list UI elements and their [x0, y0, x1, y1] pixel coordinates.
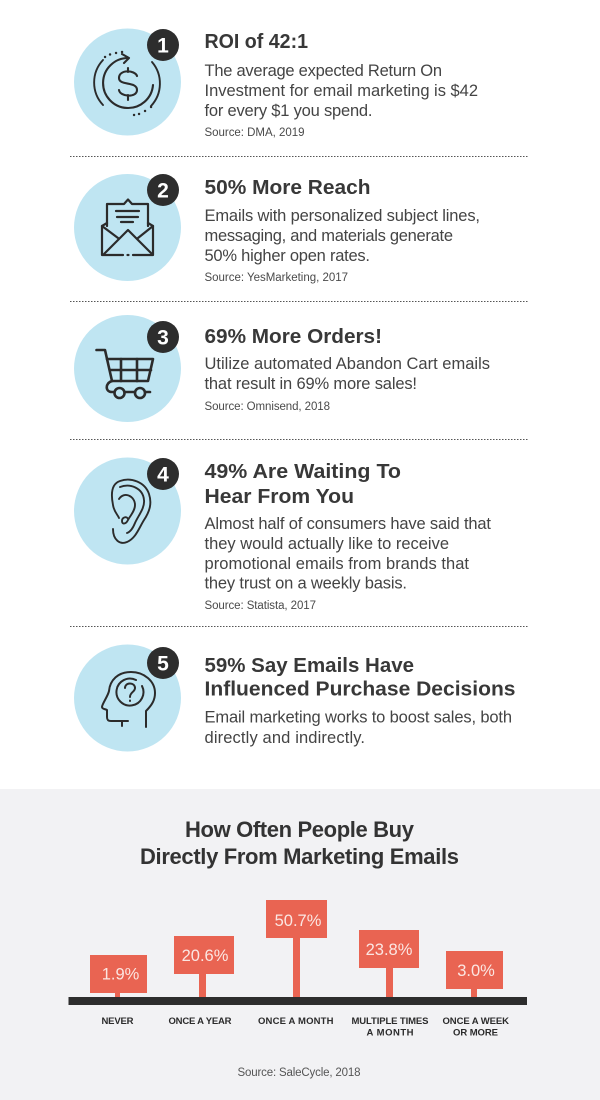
- axis labels: A MONTH: [366, 1028, 414, 1038]
- axis labels: ONCE A YEAR: [168, 1016, 232, 1027]
- body text 4: they would actually like to receive: [204, 535, 449, 553]
- badge 3: 3: [157, 326, 169, 350]
- panel: item 1 ROI: [74, 28, 478, 139]
- heading 4: Hear From You: [204, 486, 354, 508]
- badge 1: 1: [157, 34, 169, 58]
- heading 4: 49% Are Waiting To: [204, 461, 401, 483]
- badge 3: [147, 321, 179, 353]
- icon: ear: [112, 480, 150, 543]
- bar: once a week or more 3.0%: [446, 951, 503, 998]
- icon circle 3: [74, 315, 181, 422]
- source 2: Source: YesMarketing, 2017: [204, 272, 348, 284]
- icon: dollar cycle: [94, 52, 160, 115]
- heading 1: ROI of 42:1: [204, 31, 308, 53]
- body text 3: that result in 69% more sales!: [204, 375, 417, 393]
- body text 3: Utilize automated Abandon Cart emails: [204, 355, 490, 373]
- icon: shopping cart: [96, 350, 153, 398]
- panel background: [0, 789, 600, 1100]
- badge 2: 2: [157, 180, 169, 202]
- body text 4: [204, 515, 491, 592]
- panel: item 5 influence: [74, 644, 516, 752]
- icon circle 5: [74, 644, 181, 752]
- axis labels: [102, 1016, 509, 1038]
- body text 1: Investment for email marketing is $42: [204, 82, 478, 100]
- chart title: Directly From Marketing Emails: [140, 844, 459, 869]
- source 4: Source: Statista, 2017: [204, 600, 316, 612]
- heading 2: 50% More Reach: [204, 177, 370, 199]
- heading 5: 59% Say Emails Have: [204, 655, 414, 677]
- heading 5: Influenced Purchase Decisions: [204, 678, 516, 700]
- chart baseline: [68, 997, 527, 1005]
- body text 2: messaging, and materials generate: [204, 227, 453, 245]
- badge 2: [147, 174, 179, 206]
- bar: once a month 50.7%: 50.7%: [275, 912, 322, 930]
- body text 5: Email marketing works to boost sales, both: [204, 708, 512, 726]
- heading 5: [204, 655, 516, 700]
- body text 1: [204, 62, 478, 120]
- heading 4: [204, 461, 401, 508]
- bar: multiple times a month 23.8%: [359, 930, 419, 998]
- bar: once a year 20.6%: [174, 936, 234, 998]
- source 1: Source: DMA, 2019: [204, 127, 304, 139]
- axis labels: ONCE A MONTH: [258, 1016, 334, 1027]
- body text 4: Almost half of consumers have said that: [204, 515, 491, 533]
- chart title: How Often People Buy: [185, 817, 415, 842]
- chart title: [140, 817, 459, 869]
- bar: once a week or more 3.0%: 3.0%: [457, 962, 495, 980]
- chart source: Source: SaleCycle, 2018: [238, 1067, 360, 1079]
- icon circle 1: [74, 28, 181, 136]
- heading 3: 69% More Orders!: [204, 326, 382, 348]
- icon circle 4: [74, 458, 181, 564]
- body text 2: [204, 207, 480, 265]
- bar: once a month 50.7%: [266, 900, 327, 998]
- bar: never 1.9%: 1.9%: [102, 966, 140, 984]
- bar: once a year 20.6%: 20.6%: [182, 947, 229, 965]
- icon: head with question mark: [102, 672, 155, 727]
- panel: item 4 waiting: [74, 458, 491, 612]
- bar: multiple times a month 23.8%: 23.8%: [366, 941, 413, 959]
- badge 1: [147, 29, 179, 61]
- panel: item 3 orders: [74, 315, 490, 422]
- body text 3: [204, 355, 490, 393]
- bar: never 1.9%: [90, 955, 147, 998]
- panel: item 2 reach: [74, 174, 480, 284]
- body text 2: Emails with personalized subject lines,: [204, 207, 480, 225]
- badge 4: 4: [157, 464, 169, 486]
- axis labels: NEVER: [102, 1016, 134, 1027]
- source 3: Source: Omnisend, 2018: [204, 401, 330, 413]
- badge 5: 5: [157, 652, 169, 676]
- body text 4: promotional emails from brands that: [204, 555, 469, 573]
- panel: purchase frequency chart: [0, 789, 600, 1100]
- badge 4: [147, 458, 179, 490]
- body text 4: they trust on a weekly basis.: [204, 574, 407, 592]
- bar chart: [68, 900, 527, 1038]
- axis labels: OR MORE: [453, 1028, 498, 1038]
- axis labels: MULTIPLE TIMES: [352, 1016, 428, 1027]
- body text 1: for every $1 you spend.: [204, 102, 372, 120]
- body text 1: The average expected Return On: [204, 62, 442, 80]
- icon circle 2: [74, 174, 181, 281]
- body text 5: [204, 708, 512, 747]
- axis labels: ONCE A WEEK: [442, 1016, 509, 1027]
- icon: open envelope: [102, 200, 153, 255]
- body text 5: directly and indirectly.: [204, 729, 365, 747]
- badge 5: [147, 647, 179, 679]
- body text 2: 50% higher open rates.: [204, 247, 370, 265]
